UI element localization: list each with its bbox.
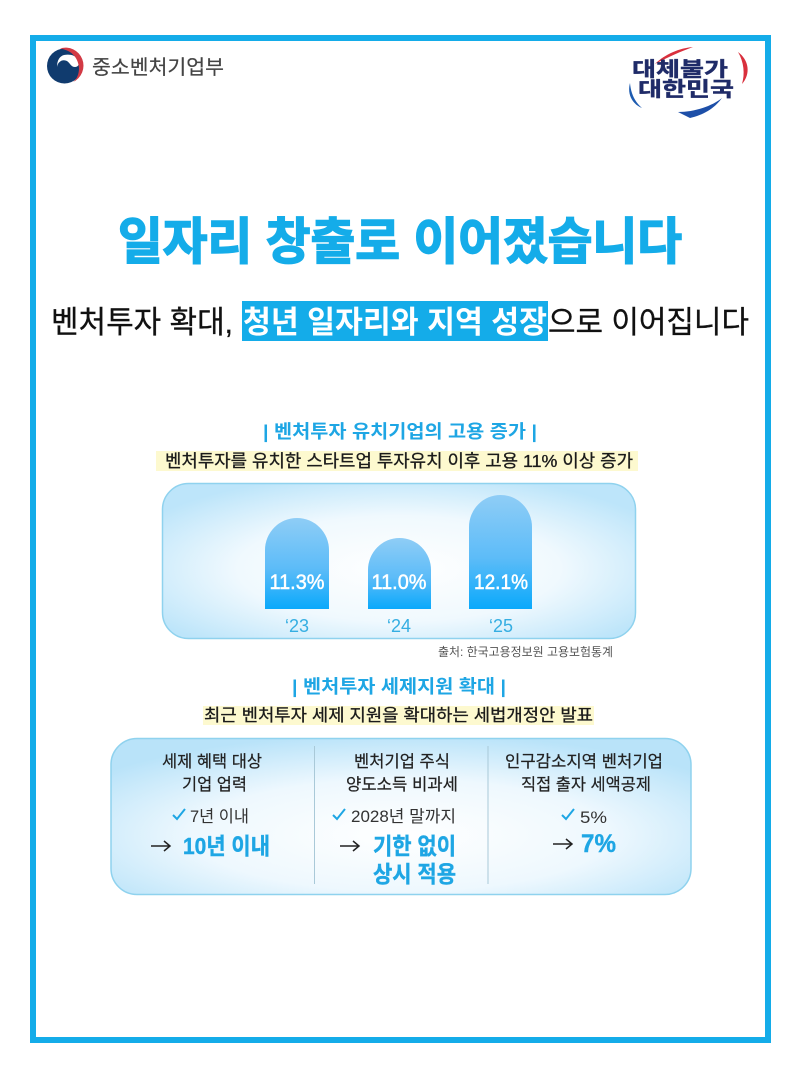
column: tax credit: 5%: [580, 808, 607, 827]
section heading: tax support: | 벤처투자 세제지원 확대 |: [292, 676, 506, 697]
campaign logo: [629, 47, 748, 118]
column: business age: 기업 업력: [182, 775, 247, 794]
bar 2024: 11.0%: [372, 571, 426, 594]
bar 2025: [469, 495, 532, 636]
column: capital gains: 2028년 말까지: [351, 807, 456, 826]
bar chart panel: [162, 484, 636, 638]
tax support panel: [111, 738, 691, 894]
subtitle: [51, 301, 749, 341]
title: 일자리 창출로 이어졌습니다: [118, 214, 682, 270]
column: capital gains: 벤처기업 주식: [354, 752, 450, 771]
ministry logo: [47, 48, 224, 84]
subtitle tail: 으로 이어집니다: [548, 305, 749, 340]
bar 2024: ‘24: [387, 616, 411, 636]
subtitle lead: 벤처투자 확대,: [51, 305, 233, 340]
logo text line 2: 대한민국: [638, 78, 734, 101]
icon: taegeuk emblem: [47, 48, 83, 84]
bar 2023: ‘23: [285, 616, 309, 636]
column: business age: [151, 752, 270, 859]
bar 2023: [265, 518, 329, 636]
bar 2024: [368, 538, 431, 636]
subtitle highlight: [242, 301, 548, 341]
column: business age: 7년 이내: [190, 807, 249, 826]
bar 2025: ‘25: [489, 616, 513, 636]
section subheading: employment: 벤처투자를 유치한 스타트업 투자유치 이후 고용 11% 이상 증가: [165, 451, 633, 471]
column: capital gains: 기한 없이: [373, 833, 456, 859]
column: capital gains: [333, 752, 458, 887]
section subheading: tax support: 최근 벤처투자 세제 지원을 확대하는 세법개정안 발표: [204, 706, 593, 725]
logo text line 1: 대체불가: [632, 58, 728, 81]
column: tax credit: 인구감소지역 벤처기업: [505, 752, 663, 771]
column: capital gains: 상시 적용: [373, 861, 456, 887]
subtitle highlighted text: 청년 일자리와 지역 성장: [243, 305, 547, 340]
column: tax credit: 7%: [581, 830, 616, 858]
section heading: employment: | 벤처투자 유치기업의 고용 증가 |: [263, 421, 537, 442]
column: tax credit: 직접 출자 세액공제: [521, 775, 651, 794]
logo swooshes: [629, 47, 748, 118]
column: tax credit: [505, 752, 663, 858]
source note: 출처: 한국고용정보원 고용보험통계: [438, 645, 613, 659]
bar 2025: 12.1%: [474, 571, 528, 594]
column: business age: 세제 혜택 대상: [162, 752, 262, 771]
ministry name: 중소벤처기업부: [92, 56, 224, 79]
column: business age: 10년 이내: [183, 833, 270, 859]
column: capital gains: 양도소득 비과세: [346, 775, 458, 794]
bar 2023: 11.3%: [270, 571, 324, 594]
